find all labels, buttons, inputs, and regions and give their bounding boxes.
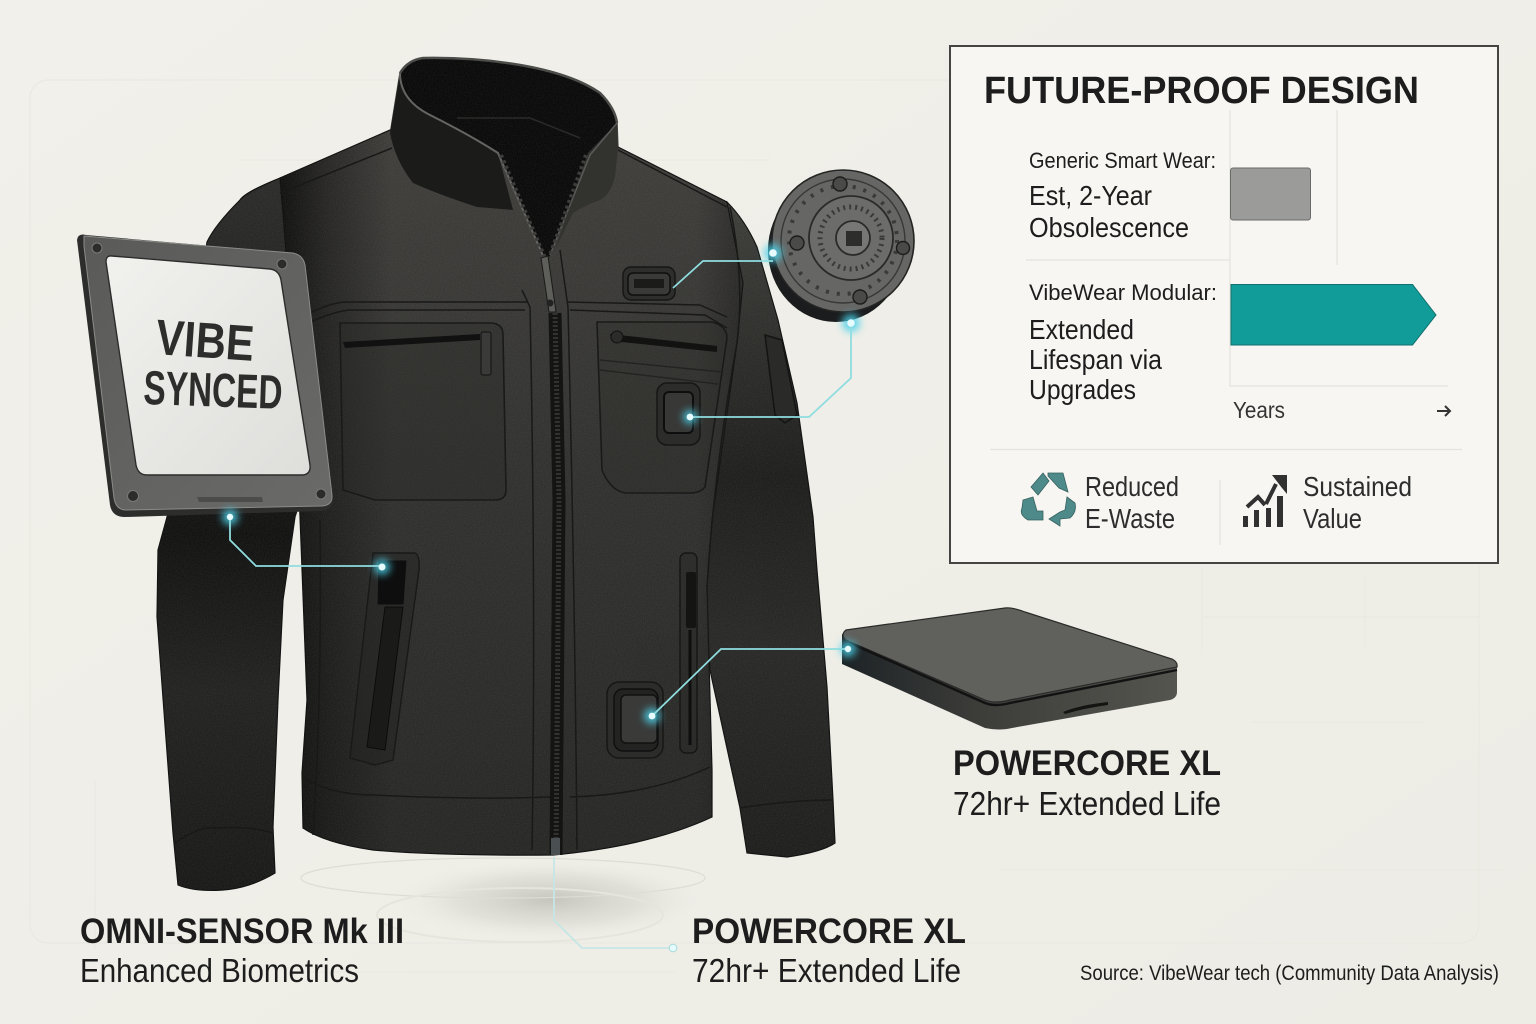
- label: powercore lower: [692, 912, 966, 989]
- bar: vibewear: [1231, 284, 1436, 345]
- collar flaps: [390, 58, 618, 258]
- label: omni-sensor: OMNI-SENSOR Mk III: [80, 912, 404, 951]
- label: powercore upper: [953, 744, 1221, 822]
- icon: growth chart: [1243, 475, 1287, 527]
- body side shading: [280, 130, 743, 855]
- main zipper: [501, 155, 586, 855]
- seams: [175, 148, 833, 850]
- row label: vibewear: VibeWear Modular:: [1029, 280, 1217, 305]
- chest sensor module: [657, 383, 700, 445]
- connector lines: [230, 261, 851, 948]
- jacket body: [280, 130, 743, 855]
- axis arrow: [1437, 406, 1450, 416]
- label: powercore lower: POWERCORE XL: [692, 912, 966, 951]
- connector dots: [227, 249, 855, 952]
- frame screws: [92, 243, 326, 502]
- row label: vibewear: Upgrades: [1029, 374, 1136, 405]
- text: sustained value: Value: [1303, 503, 1362, 534]
- card title: FUTURE-PROOF DESIGN: [984, 70, 1419, 112]
- connector glow: [222, 244, 860, 724]
- axis label: years: Years: [1233, 397, 1285, 423]
- icon: recycle: [1021, 473, 1075, 526]
- row label: generic: [1029, 148, 1216, 243]
- card: future-proof design: [950, 46, 1498, 563]
- small chest module: [623, 267, 675, 300]
- row label: generic: Obsolescence: [1029, 212, 1189, 243]
- label: powercore upper: 72hr+ Extended Life: [953, 785, 1221, 822]
- row label: vibewear: Extended: [1029, 314, 1134, 345]
- row label: generic: Generic Smart Wear:: [1029, 148, 1216, 173]
- battery pack: [842, 608, 1177, 730]
- screen: [106, 256, 310, 475]
- screen text: VIBE: [154, 309, 256, 372]
- right lower pocket zip: [680, 553, 697, 753]
- row label: vibewear: [1029, 280, 1217, 405]
- disc knobs: [790, 177, 910, 304]
- glowing connector lines: [222, 244, 860, 952]
- left chest pocket: [340, 323, 506, 500]
- bar: generic: [1230, 168, 1310, 220]
- screen text: [143, 309, 283, 420]
- left sleeve: [157, 178, 340, 890]
- fabric texture: [150, 55, 840, 895]
- lower battery module: [607, 682, 663, 758]
- text: reduced e-waste: [1085, 471, 1179, 534]
- right chest pocket: [597, 322, 727, 493]
- row label: generic: Est, 2-Year: [1029, 180, 1152, 211]
- label: omni-sensor: Enhanced Biometrics: [80, 952, 359, 989]
- text: sustained value: [1303, 471, 1412, 534]
- text: reduced e-waste: Reduced: [1085, 471, 1179, 502]
- label: powercore upper: POWERCORE XL: [953, 744, 1221, 783]
- label: omni-sensor: [80, 912, 404, 989]
- row label: vibewear: Lifespan via: [1029, 344, 1163, 375]
- text: reduced e-waste: E-Waste: [1085, 503, 1175, 534]
- text: sustained value: Sustained: [1303, 471, 1412, 502]
- label: powercore lower: 72hr+ Extended Life: [692, 952, 961, 989]
- screen text: SYNCED: [143, 362, 283, 420]
- left lower pocket zip: [350, 553, 419, 765]
- chart axes: [1026, 110, 1448, 386]
- back collar: [390, 58, 618, 270]
- jacket: [150, 55, 840, 895]
- display panel: vibe synced: [77, 235, 333, 517]
- floor shadow with rings: [301, 858, 705, 942]
- sleeve pocket: [765, 335, 797, 423]
- sensor disc: [768, 170, 914, 322]
- right sleeve: [690, 202, 835, 857]
